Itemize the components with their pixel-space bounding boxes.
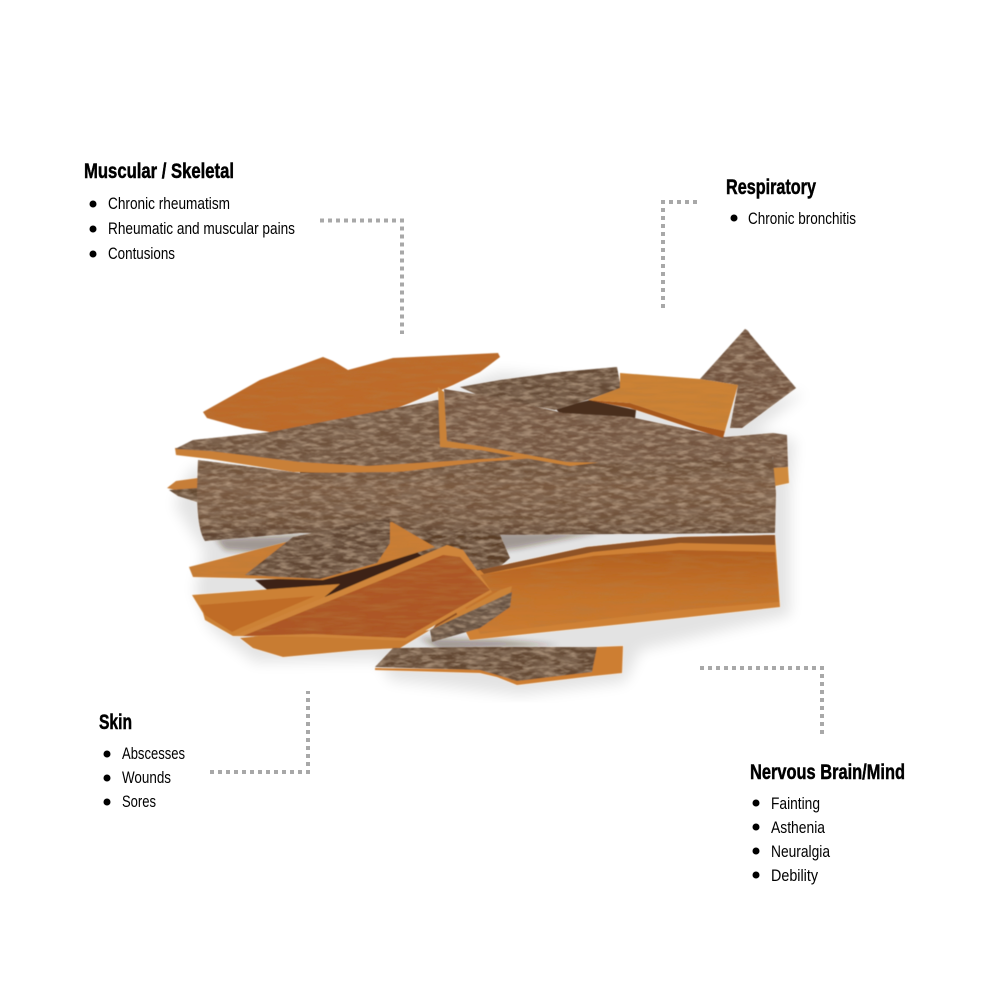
heading: Nervous Brain/Mind [750,761,905,784]
connector: nervous [700,668,822,735]
dark gap fill [300,420,772,480]
heading: Skin [99,711,132,734]
bullet list: Fainting [771,795,820,813]
dark gap fill lower [255,546,442,598]
bottom thin orange strip [240,630,430,657]
long bark over log [438,387,788,468]
left orange flake [192,584,340,636]
bullet list: Asthenia [771,819,826,837]
title: Muscular / Skeletal [84,160,295,263]
orange top slab [203,353,500,432]
bullet list [90,195,295,263]
bullet list: Abscesses [122,745,185,763]
back lower bark [388,530,510,575]
bullet list [752,795,831,885]
large reddish slab [233,545,492,641]
connector: muscular [320,220,402,334]
bullet list: Rheumatic and muscular pains [108,220,295,238]
dark gap fill upper [555,400,636,419]
bullet list: Wounds [122,769,171,787]
small brown chip [430,586,512,642]
bullet list: Sores [122,793,156,811]
dark brown chunk [245,517,390,579]
cinnamon bark photo illustration [167,329,805,695]
small orange end [770,467,789,486]
connector: skin [210,691,308,772]
orange rectangle piece [588,373,738,438]
title: Respiratory [726,176,856,228]
big open orange shell [450,535,780,640]
back brown chip [700,329,796,428]
bullet list: Contusions [108,245,175,263]
long tapering bark [175,400,560,474]
top brown strip [460,367,621,410]
bullet list: Neuralgia [771,843,831,861]
heading: Respiratory [726,176,816,199]
title: Nervous Brain/Mind [750,761,905,885]
dark gap fill chip [432,590,520,632]
connector: respiratory [663,202,697,309]
bullet list: Chronic rheumatism [108,195,230,213]
bottom bark stick [375,646,623,685]
ground shadow [175,372,805,695]
bullet list: Chronic bronchitis [748,210,856,228]
bullet list: Debility [771,867,819,885]
main rolled log [197,450,776,541]
orange wedge under chunk [189,522,435,580]
heading: Muscular / Skeletal [84,160,234,183]
bullet list [104,745,185,811]
left small curl [167,478,198,502]
contact shadows [215,405,600,650]
title: Skin [99,711,185,811]
